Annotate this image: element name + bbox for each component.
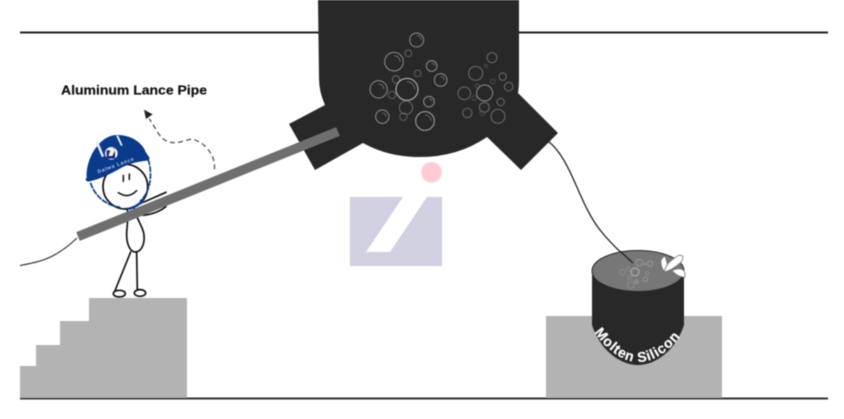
pot bubbles xyxy=(620,259,653,288)
molten silicon platform xyxy=(546,316,722,398)
curve for pot label xyxy=(594,332,684,362)
helmet logo xyxy=(105,147,118,160)
white splash xyxy=(661,255,685,277)
bright bubble cluster xyxy=(370,33,447,130)
dim bubble cluster xyxy=(458,53,513,123)
chin strap xyxy=(91,160,150,210)
worker head xyxy=(103,164,148,209)
worker figure xyxy=(86,135,166,297)
furnace bubbles xyxy=(370,33,513,130)
aluminum lance pipe xyxy=(78,132,338,236)
wire to molten silicon pot xyxy=(548,141,633,263)
furnace vessel xyxy=(289,0,558,170)
logo watermark xyxy=(350,162,442,266)
staircase platform xyxy=(20,298,187,398)
hose to lance xyxy=(20,238,77,266)
worker body xyxy=(113,192,166,297)
helmet text: Dalwa Lance xyxy=(97,156,135,175)
helmet xyxy=(86,135,149,182)
pipe label: Aluminum Lance Pipe xyxy=(61,82,207,98)
pot label: Molten Silicon xyxy=(594,326,680,363)
molten silicon pot xyxy=(590,249,686,366)
dashed arrow to pipe xyxy=(144,110,215,169)
